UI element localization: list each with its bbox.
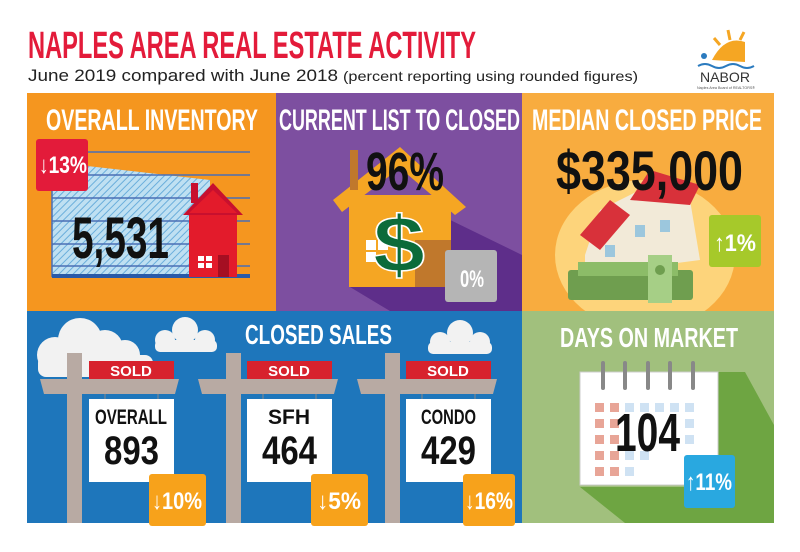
icon: house with money	[568, 170, 700, 303]
sign: overall: OVERALL	[95, 406, 167, 429]
sign: sfh: 464	[262, 429, 318, 473]
sign: overall: SOLD	[110, 363, 152, 380]
sign: condo: 429	[421, 429, 476, 473]
icon: orange house with dollar	[333, 147, 466, 289]
sign: overall: 893	[104, 429, 159, 473]
badge: up 11%	[684, 455, 735, 508]
sign: sfh: SOLD	[268, 363, 310, 380]
sign: condo	[357, 353, 497, 523]
value: 104: 104	[615, 403, 680, 463]
badge: 0%: 0%	[460, 266, 484, 293]
panel: overall inventory: OVERALL INVENTORY	[46, 104, 258, 137]
icon: calendar	[580, 363, 718, 485]
panel: days on market	[522, 311, 774, 523]
badge: up 11%: ↑11%	[686, 469, 732, 496]
value: 96%: 96%	[366, 142, 444, 202]
badge: up 1%	[709, 215, 761, 267]
icon: red house	[183, 183, 243, 277]
badge: up 1%: ↑1%	[714, 230, 756, 257]
sign: sfh	[198, 353, 338, 523]
value: 5,531: 5,531	[72, 206, 169, 271]
badge: down 5%	[311, 474, 368, 526]
logo: NABOR	[697, 30, 755, 90]
value: $335,000: $335,000	[556, 139, 743, 202]
panel: current list to closed	[276, 93, 522, 311]
sign: overall	[40, 353, 179, 523]
panel: median closed price	[522, 93, 774, 330]
icon: clouds	[37, 317, 492, 377]
badge: down 16%: ↓16%	[465, 488, 513, 515]
sign: condo: CONDO	[421, 406, 476, 429]
panel: closed sales	[27, 311, 522, 526]
subtitle: June 2019 compared with June 2018	[28, 66, 338, 85]
subtitle	[28, 66, 638, 85]
panel: overall inventory	[27, 93, 276, 311]
icon: orange house with dollar: $	[373, 200, 425, 289]
logo: NABOR: Naples Area Board of REALTORS®	[697, 85, 755, 90]
title: NAPLES AREA REAL ESTATE ACTIVITY	[28, 25, 476, 67]
badge: down 10%: ↓10%	[152, 488, 202, 515]
subtitle: (percent reporting using rounded figures)	[343, 68, 638, 84]
sign: sfh: SFH	[268, 406, 310, 429]
badge: down 13%: ↓13%	[39, 152, 87, 179]
badge: 0%	[445, 250, 497, 302]
panel: current list to closed: CURRENT LIST TO CLOSED	[279, 104, 520, 137]
badge: down 13%	[36, 139, 88, 191]
sign: condo: SOLD	[427, 363, 469, 380]
badge: down 5%: ↓5%	[317, 488, 361, 515]
panel: closed sales: CLOSED SALES	[245, 319, 392, 350]
chart: inventory area	[52, 152, 250, 278]
logo: NABOR: NABOR	[700, 69, 750, 85]
badge: down 10%	[149, 474, 206, 526]
badge: down 16%	[463, 474, 515, 526]
